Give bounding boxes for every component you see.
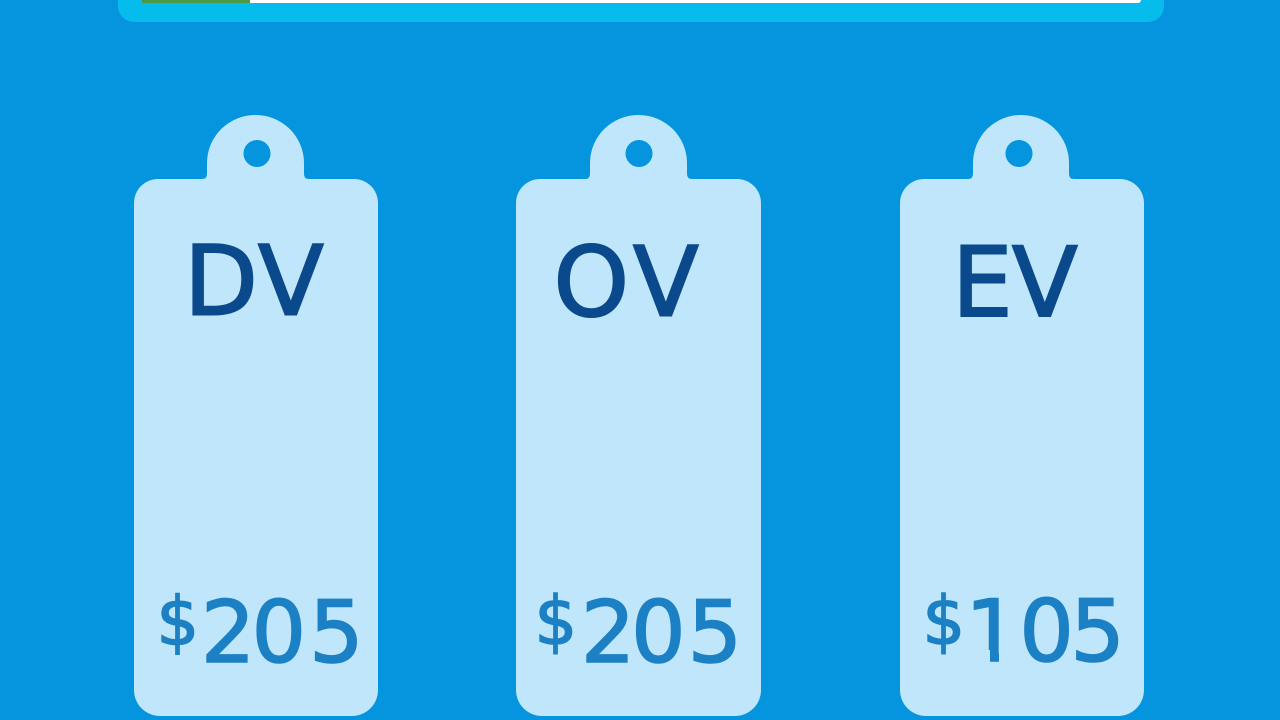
progress bar fill [142, 0, 250, 3]
tag label: DV [184, 226, 324, 338]
tag price: 205 [581, 583, 742, 683]
tag price [927, 592, 1118, 663]
progress bar [118, 0, 1164, 22]
tag price: $ [534, 582, 577, 660]
tag label: EV [952, 227, 1078, 339]
tag price: 1 [965, 582, 1020, 682]
tag price: $ [156, 582, 199, 660]
price tag: EV [900, 115, 1144, 716]
tag price: 05 [1019, 582, 1125, 682]
tag label: OV [554, 226, 699, 338]
price tag: DV [134, 115, 378, 716]
tag price: $ [922, 582, 965, 660]
price tag: OV [516, 115, 761, 716]
tag price: 205 [201, 583, 364, 683]
